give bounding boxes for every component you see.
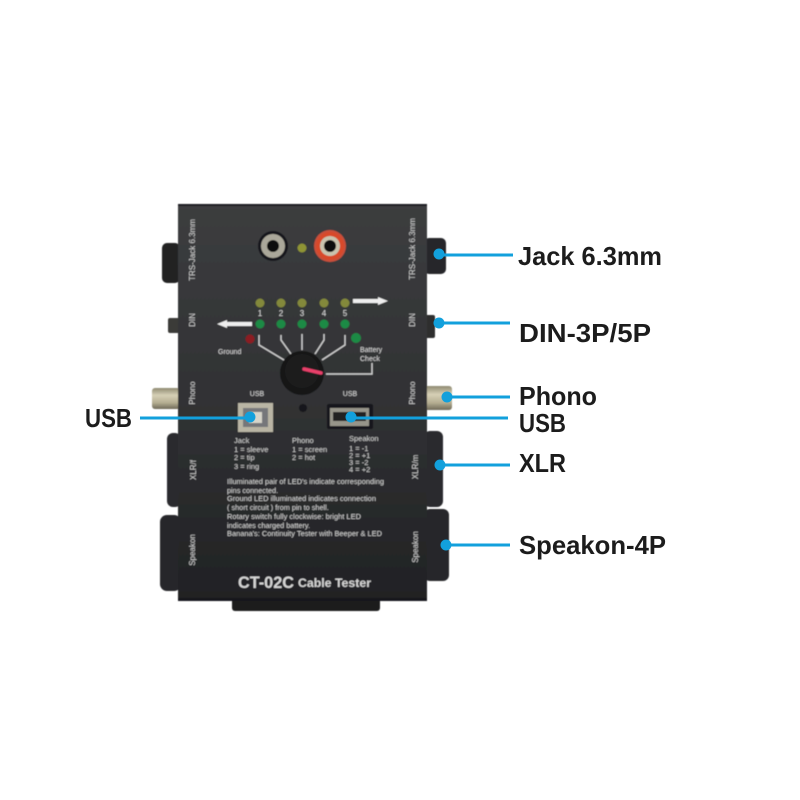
callout: Phono — [442, 381, 597, 411]
LED indicators: Check — [360, 356, 380, 363]
LED indicators: 2 — [279, 309, 284, 318]
side labels: Speakon — [411, 531, 420, 563]
LED indicators: 5 — [343, 309, 348, 318]
callout: USB left — [85, 403, 256, 433]
instructions text — [227, 477, 384, 538]
USB A port — [327, 404, 373, 429]
pinout legends: 3 = -2 — [349, 458, 368, 467]
pinout legends: 4 = +2 — [349, 465, 370, 474]
banana sockets — [258, 230, 346, 262]
callout: XLR: XLR — [519, 448, 566, 478]
LED indicators — [218, 298, 383, 363]
instructions text: pins connected. — [227, 486, 278, 495]
callout: Phono: Phono — [519, 381, 597, 411]
product name: CT-02C — [238, 574, 294, 592]
pinout legends: Jack — [234, 436, 250, 445]
panel: enclosure — [178, 204, 427, 601]
callout: USB right — [346, 408, 566, 438]
callout: Jack 6.3mm — [434, 241, 662, 271]
LED indicators: 1 — [258, 309, 263, 318]
side labels: TRS-Jack 6.3mm — [408, 218, 417, 280]
LED indicators: Battery — [360, 347, 383, 354]
bottom connector — [232, 596, 380, 611]
callout: Jack 6.3mm: Jack 6.3mm — [518, 241, 662, 271]
USB B port — [238, 403, 273, 432]
pinout legends: 2 = hot — [292, 453, 316, 462]
pinout legends: 2 = tip — [234, 453, 255, 462]
side labels: XLR/m — [411, 454, 420, 479]
arrows — [217, 297, 388, 328]
callout: Speakon-4P — [440, 530, 666, 560]
instructions text: Rotary switch fully clockwise: bright LED — [227, 512, 361, 521]
side labels — [188, 218, 420, 566]
callout: DIN-3P/5P: DIN-3P/5P — [519, 318, 651, 348]
pinout legends: 1 = -1 — [349, 444, 368, 453]
side labels: XLR/f — [189, 459, 198, 480]
selector lines — [259, 334, 372, 374]
callout: USB right: USB — [519, 408, 566, 438]
pinout legends: 2 = +1 — [349, 451, 370, 460]
right side connectors — [424, 238, 452, 581]
instructions text: Ground LED illuminated indicates connection — [227, 494, 376, 503]
rotary knob — [280, 351, 324, 395]
side labels: Phono — [408, 381, 417, 405]
pinout legends: 3 = ring — [234, 462, 259, 471]
pinout legends: Phono — [292, 436, 314, 445]
LED indicators: 3 — [300, 309, 305, 318]
callout: USB left: USB — [85, 403, 132, 433]
pinout legends: Speakon — [349, 434, 379, 443]
pinout legends — [234, 434, 379, 474]
callout: DIN-3P/5P — [434, 318, 651, 348]
power hole — [299, 404, 307, 412]
LED indicators: Ground — [218, 349, 241, 356]
instructions text: Illuminated pair of LED's indicate corresponding — [227, 477, 384, 486]
USB labels: USB — [343, 391, 358, 398]
product name: Cable Tester — [298, 578, 372, 590]
pinout legends: 1 = sleeve — [234, 445, 268, 454]
device: cable tester — [152, 204, 452, 611]
instructions text: ( short circuit ) from pin to shell. — [227, 503, 329, 512]
instructions text: indicates charged battery. — [227, 521, 310, 530]
callout: XLR — [434, 448, 566, 478]
LED indicators: 4 — [322, 309, 327, 318]
callout: Speakon-4P: Speakon-4P — [519, 530, 666, 560]
side labels: DIN — [188, 313, 197, 327]
product name — [238, 574, 372, 592]
side labels: Phono — [188, 381, 197, 405]
USB labels — [250, 391, 358, 398]
instructions text: Banana's: Continuity Tester with Beeper & LED — [227, 529, 382, 538]
pinout legends: 1 = screen — [292, 445, 327, 454]
left side connectors — [152, 243, 181, 591]
side labels: TRS-Jack 6.3mm — [188, 219, 197, 281]
side labels: DIN — [408, 313, 417, 327]
USB labels: USB — [250, 391, 265, 398]
side labels: Speakon — [188, 534, 197, 566]
